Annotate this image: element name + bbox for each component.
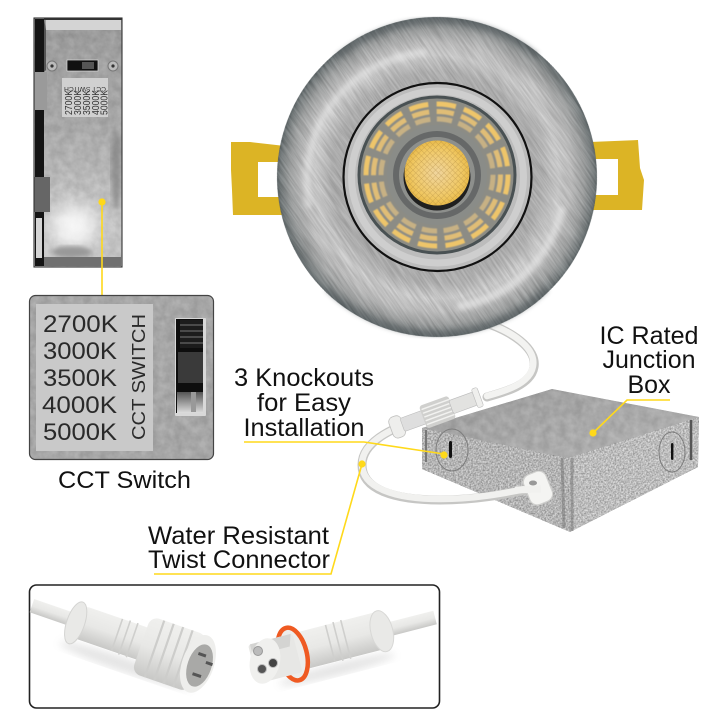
- small rotated switch label: CCT SWITCH: [64, 85, 106, 92]
- callout: line from back plate to switch close-up: [98, 198, 106, 296]
- label: CCT Switch: CCT Switch: [58, 467, 191, 494]
- small rotated switch label: 3000K: [73, 90, 84, 115]
- small rotated switch label: 4000K: [91, 90, 102, 115]
- panel: CCT switch close-up: [30, 296, 214, 460]
- small rotated switch label: 5000K: [100, 90, 110, 115]
- label: 3 Knockouts for Easy Installation: Installation: [244, 414, 364, 442]
- temperature options: 4000K: [42, 392, 117, 419]
- left face: [422, 428, 570, 532]
- label: Water Resistant Twist Connector: Water Resistant: [148, 522, 329, 550]
- female connector face with three pin holes: [246, 635, 284, 687]
- callout: twist connector leader: [154, 460, 366, 574]
- label: 3 Knockouts for Easy Installation: 3 Knockouts: [234, 364, 374, 392]
- label: 3 Knockouts for Easy Installation: [234, 364, 374, 442]
- rubber grommet: [515, 469, 555, 507]
- LED dome: [404, 140, 470, 210]
- label: Water Resistant Twist Connector: Twist Connector: [148, 546, 330, 574]
- photo: back of junction box with CCT switch: [34, 18, 122, 267]
- label: IC Rated Junction Box: [600, 322, 698, 399]
- slider switch: [175, 318, 206, 416]
- temperature options: 3500K: [43, 365, 117, 392]
- left yellow mounting clip: [231, 142, 285, 215]
- knockout right: [659, 432, 685, 472]
- recessed light fixture: [214, 0, 660, 400]
- vertical switch label: CCT SWITCH: [129, 314, 149, 440]
- upper cable: [470, 318, 534, 397]
- inner gimbal ring: [344, 83, 532, 271]
- male connector: [21, 578, 223, 699]
- small rotated switch label: [62, 78, 110, 117]
- bezel: [214, 0, 660, 400]
- right face: [568, 417, 699, 532]
- temperature options: 3000K: [43, 338, 117, 365]
- temperature options: 2700K: [43, 311, 118, 338]
- junction box: [422, 389, 699, 532]
- female connector: [246, 591, 443, 695]
- lower cable: [362, 430, 535, 500]
- callout: junction box leader: [589, 400, 670, 437]
- label: 3 Knockouts for Easy Installation: for Easy: [257, 389, 352, 417]
- LED lens reflector: [359, 97, 515, 253]
- label: IC Rated Junction Box: Junction: [602, 346, 696, 374]
- temperature options: [42, 311, 118, 446]
- label: IC Rated Junction Box: IC Rated: [600, 322, 698, 350]
- knockout left: [436, 429, 468, 471]
- small rotated switch label: 2700K: [64, 90, 75, 115]
- panel: connector detail: [21, 578, 443, 708]
- twist connector: [387, 385, 484, 440]
- white cables and twist connector: [362, 318, 555, 507]
- small rotated switch label: 3500K: [82, 90, 93, 115]
- callout: knockouts leader: [244, 442, 448, 459]
- label: IC Rated Junction Box: Box: [628, 371, 671, 399]
- top face: [422, 389, 699, 458]
- temperature options: 5000K: [43, 419, 117, 446]
- label: Water Resistant Twist Connector: [148, 522, 330, 574]
- right yellow mounting clip: [590, 140, 644, 210]
